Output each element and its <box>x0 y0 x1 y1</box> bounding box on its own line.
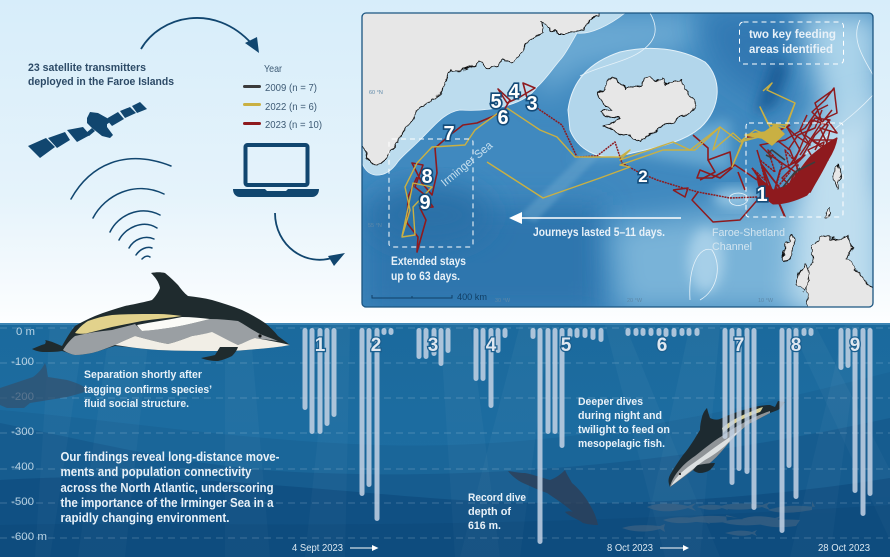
label: Faroe-Shetland Channel: Channel <box>712 241 752 253</box>
transmitter caption: 23 satellite transmitters <box>28 62 146 74</box>
depth axis labels: -600 m <box>11 531 47 543</box>
contour lines <box>580 13 873 300</box>
dashed callout: two key feeding <box>749 29 836 41</box>
map numbers: 6 <box>497 107 509 129</box>
arrow: journey direction <box>509 212 681 224</box>
dive group 2 <box>360 328 394 521</box>
track: 2022 north loop <box>745 83 795 145</box>
text: deeper dives <box>578 396 670 450</box>
land: Greenland <box>355 5 603 166</box>
label: extended stays: up to 63 days. <box>391 271 460 283</box>
map numbers: 9 <box>419 192 431 214</box>
land: Iceland <box>597 76 695 141</box>
timeline date: 8 Oct: 8 Oct 2023 <box>607 543 653 554</box>
coordinate labels: 55 °N <box>368 223 382 229</box>
dive group numbers: 2 <box>371 335 381 356</box>
text: record dive: Record dive <box>468 492 526 504</box>
text: key findings: rapidly changing environment. <box>60 511 230 525</box>
text: separation note: Separation shortly after <box>84 369 203 381</box>
shadow dolphin record dive <box>508 470 598 525</box>
depth axis labels <box>11 326 47 543</box>
track: 2022 <box>402 108 775 237</box>
dive group numbers: 5 <box>561 335 572 356</box>
track: 2023 east cluster <box>747 88 837 217</box>
text: deeper dives: Deeper dives <box>578 396 643 408</box>
dive group 7 <box>722 328 756 510</box>
text: deeper dives: mesopelagic fish. <box>578 438 665 450</box>
depth axis labels: -100 <box>11 356 34 368</box>
map numbers: 5 <box>490 91 502 113</box>
label: Faroe-Shetland Channel <box>712 228 784 250</box>
panel: map <box>355 5 890 315</box>
dive group numbers: 6 <box>657 335 667 356</box>
label: Faroe-Shetland Channel: Faroe-Shetland <box>712 227 785 239</box>
curved arrow: satellite to laptop <box>141 18 259 53</box>
coordinate labels: 60 °N <box>369 90 383 96</box>
text: record dive: depth of <box>468 506 511 518</box>
land: Scotland <box>800 236 880 315</box>
label: Irminger Sea: Irminger Sea <box>439 139 496 189</box>
shadow dolphin left <box>0 363 90 408</box>
dive group numbers: 3 <box>428 335 438 356</box>
map numbers: 8 <box>421 166 433 188</box>
main surfacing dolphin <box>32 272 290 361</box>
depth axis labels: -500 <box>11 496 34 508</box>
dive group numbers: 4 <box>486 335 497 356</box>
dive group numbers <box>315 335 860 356</box>
dive group numbers: 7 <box>734 335 744 356</box>
timeline date: 4 Sept: 4 Sept 2023 <box>292 543 343 554</box>
curved arrow: laptop to map <box>275 213 345 266</box>
depth axis labels: -300 <box>11 426 34 438</box>
text: deeper dives: during night and <box>578 410 662 422</box>
text: separation note <box>84 369 212 410</box>
scale bar: 400 km <box>457 292 487 303</box>
icon: laptop <box>233 145 319 197</box>
label: extended stays: Extended stays <box>391 256 466 268</box>
timeline date: 4 Sept <box>292 543 378 554</box>
dashed callout: areas identified <box>749 44 833 56</box>
dive depth bars <box>302 328 872 544</box>
track: 2023 west leg <box>407 83 760 252</box>
dive group 9 <box>838 328 872 516</box>
icon: signal arcs <box>71 159 171 259</box>
map numbers <box>419 81 768 214</box>
map frame <box>362 13 873 307</box>
dive group numbers: 1 <box>315 335 326 356</box>
text: key findings: ments and population connectivity <box>60 465 252 479</box>
dive group 4 <box>474 328 508 408</box>
land masses <box>355 5 880 315</box>
legend: year: Year <box>264 63 282 75</box>
transmitter caption <box>28 62 174 88</box>
shelf: Iceland <box>568 48 717 157</box>
coordinate labels: 10 °W <box>758 298 774 304</box>
dive group numbers: 9 <box>850 335 860 356</box>
text: separation note: fluid social structure. <box>84 398 189 410</box>
legend 2023: 2023 (n = 10) <box>265 119 322 131</box>
shelf: Greenland <box>362 13 625 175</box>
text: deeper dives: twilight to feed on <box>578 424 670 436</box>
dive group 3 <box>416 328 450 366</box>
label: extended stays <box>391 256 466 283</box>
land: islands <box>783 165 840 292</box>
depth axis labels: -400 <box>11 461 34 473</box>
icon: satellite <box>28 102 147 158</box>
coordinate labels: 30 °W <box>495 298 511 304</box>
text: key findings: Our findings reveal long-distance move- <box>60 450 280 464</box>
dive group 6 <box>626 328 700 337</box>
ocean depth panel <box>0 323 890 557</box>
depth axis labels: 0 m <box>16 326 35 338</box>
map numbers: 1 <box>756 184 768 206</box>
bathymetry shading <box>362 13 890 315</box>
coordinate labels: 20 °W <box>627 298 643 304</box>
dive group 1 <box>302 328 336 434</box>
timeline date: 28 Oct: 28 Oct 2023 <box>818 543 870 554</box>
depth grid lines <box>0 328 890 538</box>
diving dolphin <box>668 401 785 487</box>
legend 2022: 2022 (n = 6) <box>265 101 317 113</box>
text: record dive <box>468 492 526 532</box>
dashed box: feeding area east <box>746 123 843 217</box>
dive group 5 <box>530 328 604 544</box>
text: key findings: across the North Atlantic, underscoring <box>60 481 274 495</box>
scale bar <box>372 294 486 300</box>
map numbers: 7 <box>443 123 455 145</box>
map numbers: 4 <box>508 81 520 103</box>
track: 2009 <box>766 150 815 187</box>
coordinate labels <box>368 90 774 304</box>
label: journeys: Journeys lasted 5–11 days. <box>533 225 665 239</box>
dashed callout <box>740 22 844 64</box>
text: record dive: 616 m. <box>468 520 501 532</box>
text: key findings: the importance of the Irminger Sea in a <box>60 496 274 510</box>
text: key findings <box>60 450 280 525</box>
timeline date: 8 Oct <box>607 543 689 554</box>
dive group numbers: 8 <box>791 335 801 356</box>
map numbers: 2 <box>638 167 648 186</box>
background: sky <box>0 0 890 325</box>
dashed box: feeding area west <box>389 139 473 247</box>
legend 2009: 2009 (n = 7) <box>265 82 317 94</box>
transmitter caption: deployed in the Faroe Islands <box>28 76 174 88</box>
depth axis labels: -200 <box>11 391 34 403</box>
legend: year <box>243 63 322 131</box>
text: separation note: tagging confirms species’ <box>84 384 212 396</box>
dive group 8 <box>780 328 814 533</box>
fish school <box>622 501 815 536</box>
map numbers: 3 <box>526 93 538 115</box>
